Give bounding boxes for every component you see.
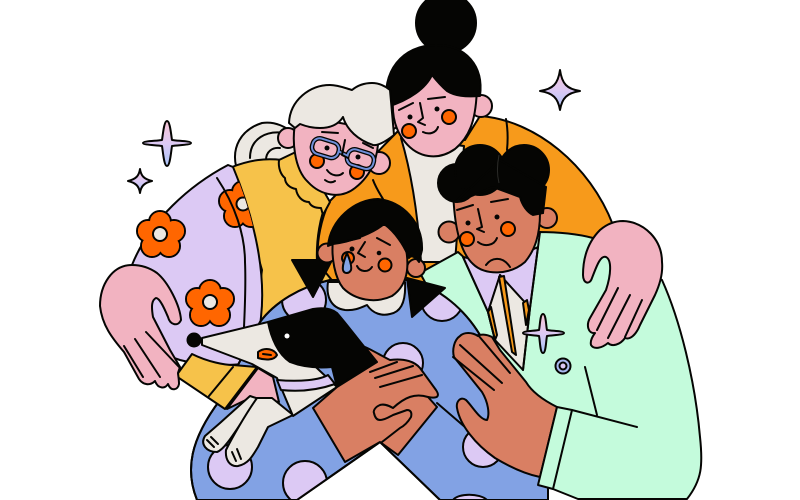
child head and face	[318, 199, 425, 300]
mother hand on father's shoulder	[583, 221, 662, 348]
sparkle: left long	[143, 121, 191, 166]
father cuff	[538, 407, 572, 489]
grandmother body: yellow vest	[232, 159, 335, 322]
child bows	[292, 260, 445, 317]
sparkle: left small	[128, 169, 152, 193]
child collar	[328, 282, 405, 315]
mother body: orange jacket and shirt	[318, 116, 613, 300]
flower: sleeve edge	[216, 177, 253, 327]
flower: upper sleeve	[137, 211, 185, 257]
jacket button	[556, 358, 570, 374]
father jacket	[420, 232, 701, 499]
grandmother hair bun	[235, 123, 300, 170]
mother head with hair, bun and face	[378, 0, 492, 156]
father hand	[453, 333, 557, 477]
grandmother hand	[100, 265, 181, 389]
grandmother cuff and wrist	[176, 354, 279, 409]
illustration: family hugging with dog	[99, 0, 702, 500]
sparkle: on father's jacket	[523, 314, 564, 353]
grandmother head with white hair and glasses	[278, 83, 394, 215]
dog nose	[186, 332, 202, 348]
child hand on dog	[313, 347, 438, 462]
sparkle: top right	[540, 70, 580, 110]
flower: lower sleeve	[186, 280, 234, 326]
father head with curly hair	[438, 145, 557, 272]
child body: blue dress with dots	[191, 278, 548, 500]
grandmother sleeve with flowers	[120, 165, 267, 365]
dog	[186, 308, 377, 466]
dog front legs	[203, 396, 293, 466]
dog head and neck	[202, 308, 377, 416]
